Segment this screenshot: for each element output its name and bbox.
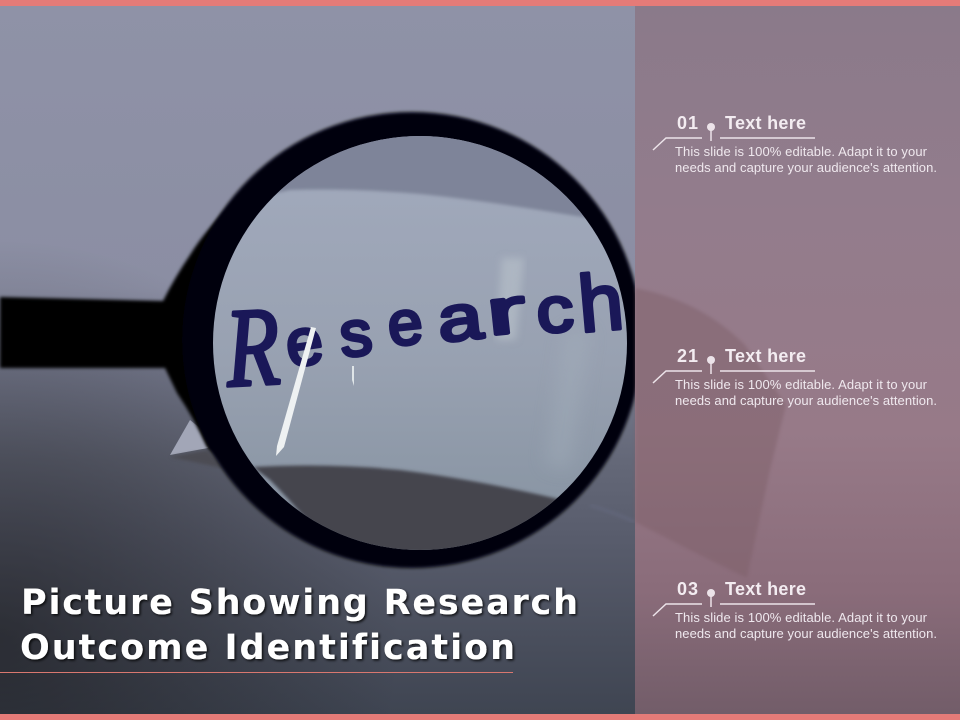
body 01: needs and capture your audience's attention. <box>675 160 937 175</box>
handwritten word Research: R <box>222 284 283 411</box>
lens ring <box>182 112 642 568</box>
handwritten word Research: e <box>384 288 426 360</box>
body 21 <box>675 377 937 408</box>
soft highlight right <box>545 330 590 470</box>
lens interior <box>213 136 627 550</box>
bottom-left vignette <box>0 280 322 714</box>
body 03: This slide is 100% editable. Adapt it to your <box>675 610 928 625</box>
note shadow wedge <box>176 450 219 467</box>
number 03: 03 <box>677 579 698 599</box>
paper edge right of lens <box>590 505 635 522</box>
wall background <box>0 0 635 720</box>
bottom accent bar <box>0 714 960 720</box>
top accent bar <box>0 0 960 6</box>
handwritten word Research: h <box>575 256 627 349</box>
connector icon 03 <box>653 589 815 616</box>
connector icon 21 <box>653 356 815 383</box>
body 01: This slide is 100% editable. Adapt it to your <box>675 144 928 159</box>
body 03: needs and capture your audience's attention. <box>675 626 937 641</box>
body 21: This slide is 100% editable. Adapt it to your <box>675 377 928 392</box>
magnifier handle <box>0 206 228 454</box>
body 03 <box>675 610 937 641</box>
number 01: 01 <box>677 113 698 133</box>
handwritten word Research: s <box>336 296 375 371</box>
photo: magnifying glass over research note <box>0 0 642 720</box>
title underline <box>0 672 513 673</box>
title: Picture Showing Research <box>21 583 578 623</box>
handwritten word Research: a <box>434 280 487 356</box>
white reflection streak <box>276 327 316 456</box>
item 01 <box>653 113 937 175</box>
connector icon 01 <box>653 123 815 150</box>
small reflection tick <box>352 366 354 386</box>
right tinted panel <box>635 0 960 720</box>
heading 01: Text here <box>725 113 806 133</box>
handwritten word Research: r <box>483 274 529 349</box>
ghost paper shape through panel <box>635 288 786 578</box>
title <box>20 583 578 668</box>
handwritten word Research: c <box>534 273 576 347</box>
heading 21: Text here <box>725 346 806 366</box>
handwritten word Research: e <box>281 302 327 381</box>
body 21: needs and capture your audience's attention. <box>675 393 937 408</box>
dark shadow shape in lens <box>254 464 558 550</box>
paper note behind lens <box>170 420 208 455</box>
body 01 <box>675 144 937 175</box>
teal wedge at lens bottom-left <box>240 467 345 560</box>
item 03 <box>653 579 937 641</box>
item 21 <box>653 346 937 408</box>
handwritten word Research <box>226 271 622 388</box>
strip above the paper <box>277 136 585 218</box>
title: Outcome Identification <box>20 628 515 668</box>
glare streak <box>496 258 524 340</box>
number 21: 21 <box>677 346 698 366</box>
lens glass <box>213 136 627 550</box>
heading 03: Text here <box>725 579 806 599</box>
